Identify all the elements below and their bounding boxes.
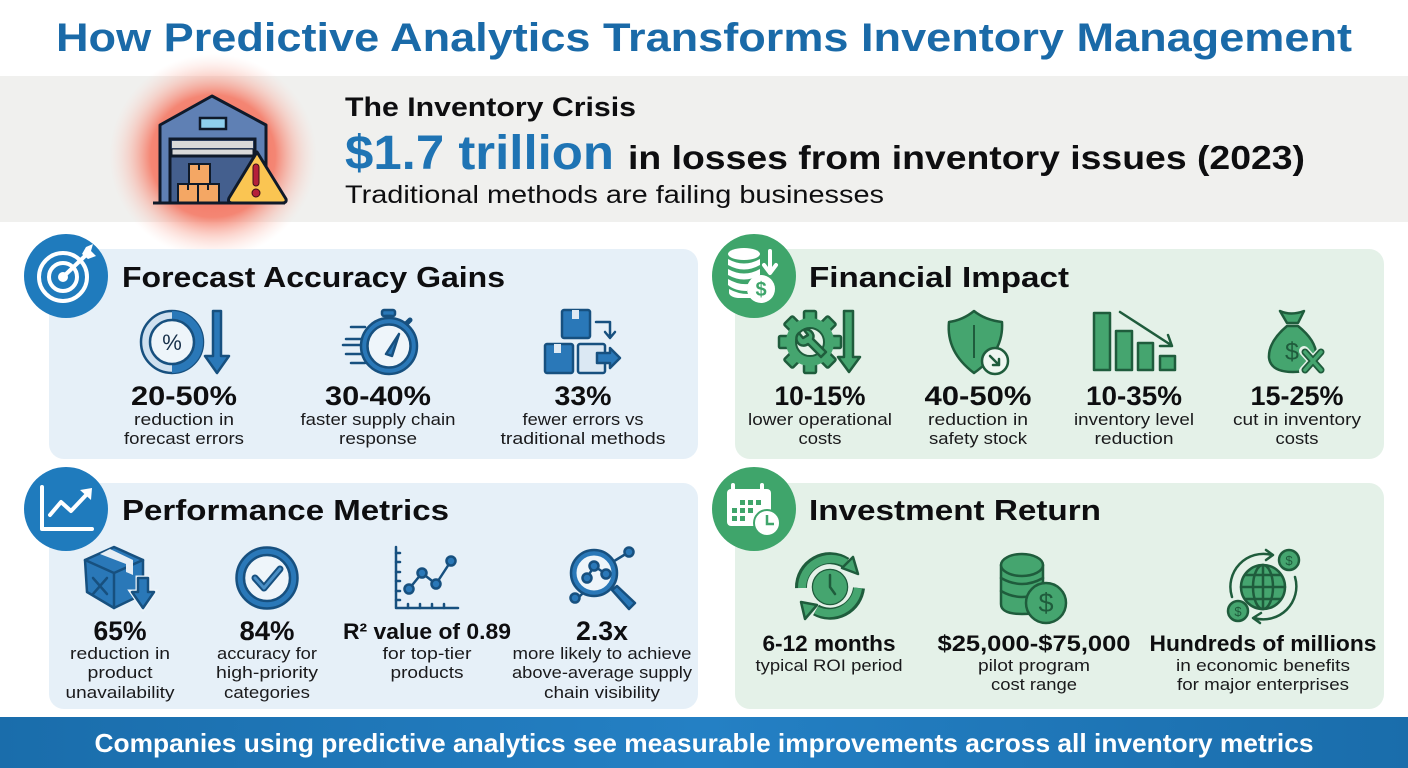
losses text: in losses from inventory issues (2023) — [628, 139, 1305, 176]
stat: $25,000-$75,000 — [938, 554, 1130, 694]
stat: R² value of 0.89 — [343, 547, 511, 682]
icon: clock with cycle arrows — [801, 557, 859, 619]
value: 20-50% — [131, 381, 237, 411]
stat: 40-50% — [924, 311, 1032, 448]
description: reduction in — [70, 644, 170, 663]
icon: boxes with arrows — [545, 310, 620, 373]
panel: inventory crisis banner — [0, 54, 1408, 258]
description — [1176, 656, 1350, 694]
heading: Financial Impact — [809, 262, 1069, 294]
icon: target badge — [24, 234, 108, 318]
icon: progress ring with check — [236, 548, 298, 608]
icon: magnifier with network — [570, 548, 635, 609]
heading: Performance Metrics — [122, 495, 449, 527]
description: costs — [1276, 429, 1318, 448]
description: above-average supply — [512, 663, 693, 682]
value: 15-25% — [1250, 381, 1344, 411]
description: faster supply chain — [300, 410, 456, 429]
value: R² value of 0.89 — [343, 619, 511, 644]
description: for major enterprises — [1177, 675, 1349, 694]
icon: globe with coins: $ — [1285, 553, 1293, 568]
description: typical ROI period — [756, 656, 902, 675]
description: cost range — [991, 675, 1077, 694]
stat: 20-50% — [124, 311, 244, 448]
description: lower operational — [748, 410, 892, 429]
icon: scatter line chart — [396, 547, 458, 608]
icon: coins badge: $ — [755, 279, 767, 301]
stat: Hundreds of millions — [1150, 550, 1376, 694]
description — [66, 644, 175, 702]
description: safety stock — [929, 429, 1028, 448]
value: 6-12 months — [762, 631, 896, 656]
red glow — [109, 54, 317, 258]
big number: $1.7 trillion — [345, 127, 614, 180]
icon: money bag with x: $ — [1285, 338, 1299, 366]
description: chain visibility — [544, 683, 661, 702]
icon: calendar badge — [712, 467, 796, 551]
icon: globe with coins: $ — [1234, 604, 1242, 619]
description: reduction in — [134, 410, 234, 429]
stat: 65% — [66, 547, 175, 702]
description: accuracy for — [217, 644, 317, 663]
description — [928, 410, 1028, 448]
description — [1074, 410, 1194, 448]
description: for top-tier — [382, 644, 472, 663]
icon: chart badge — [24, 467, 108, 551]
stat: 10-35% — [1074, 312, 1194, 448]
description — [512, 644, 693, 702]
description: forecast errors — [124, 429, 244, 448]
value: Hundreds of millions — [1150, 631, 1376, 656]
description — [382, 644, 472, 682]
heading: Investment Return — [809, 495, 1101, 527]
value: 84% — [240, 616, 294, 646]
footer banner — [0, 717, 1408, 768]
icon: descending bars — [1094, 312, 1175, 370]
value: 65% — [94, 616, 146, 646]
description — [216, 644, 319, 702]
icon: stopwatch — [343, 310, 417, 374]
value: 30-40% — [325, 381, 431, 411]
stat: 33% — [500, 310, 666, 448]
icon: percent ring with down arrow: % — [162, 330, 182, 355]
description: more likely to achieve — [512, 644, 692, 663]
description: reduction in — [928, 410, 1028, 429]
description — [978, 656, 1090, 694]
description: categories — [224, 683, 310, 702]
description: products — [390, 663, 464, 682]
icon: coin stack with dollar coin: $ — [1038, 588, 1054, 618]
description: inventory level — [1074, 410, 1194, 429]
value: 2.3x — [576, 616, 628, 646]
icon: shield with down arrow — [949, 311, 1008, 374]
description: reduction — [1094, 429, 1174, 448]
stat: 6-12 months — [756, 557, 902, 675]
description: unavailability — [66, 683, 175, 702]
icon: coin stack with dollar coin — [1001, 554, 1066, 623]
value: 33% — [554, 381, 612, 411]
description — [500, 410, 666, 448]
description: costs — [798, 429, 842, 448]
stat: 2.3x — [512, 548, 693, 702]
stat: 10-15% — [748, 311, 892, 448]
stat: 30-40% — [300, 310, 456, 448]
icon: warehouse with warning — [153, 96, 286, 203]
crisis heading: The Inventory Crisis — [345, 92, 636, 122]
description: pilot program — [978, 656, 1090, 675]
description — [748, 410, 892, 448]
panel: performance metrics — [24, 467, 698, 709]
icon: gear with wrench and arrow — [779, 311, 860, 373]
description: high-priority — [216, 663, 319, 682]
icon: coins badge — [712, 234, 796, 318]
description — [300, 410, 456, 448]
stat: 15-25% — [1233, 311, 1362, 448]
description: response — [339, 429, 417, 448]
icon: globe with coins — [1228, 550, 1299, 623]
footer banner: Companies using predictive analytics see measurable improvements across all inventory metrics — [94, 728, 1314, 758]
description: cut in inventory — [1233, 410, 1362, 429]
panel: financial impact — [712, 234, 1384, 459]
crisis subtext: Traditional methods are failing businesses — [345, 181, 884, 209]
value: 40-50% — [924, 381, 1032, 411]
icon: box with x and down arrow — [85, 547, 154, 608]
description: fewer errors vs — [522, 410, 644, 429]
panel: forecast accuracy gains — [24, 234, 698, 459]
value: 10-35% — [1086, 381, 1182, 411]
stat: 84% — [216, 548, 319, 702]
value: $25,000-$75,000 — [938, 631, 1130, 656]
description — [124, 410, 244, 448]
description — [1233, 410, 1362, 448]
title: How Predictive Analytics Transforms Inventory Management — [56, 16, 1352, 60]
description: in economic benefits — [1176, 656, 1350, 675]
value: 10-15% — [774, 381, 866, 411]
panel: investment return — [712, 467, 1384, 709]
description: traditional methods — [500, 429, 666, 448]
description: product — [88, 663, 153, 682]
heading: Forecast Accuracy Gains — [122, 262, 505, 294]
